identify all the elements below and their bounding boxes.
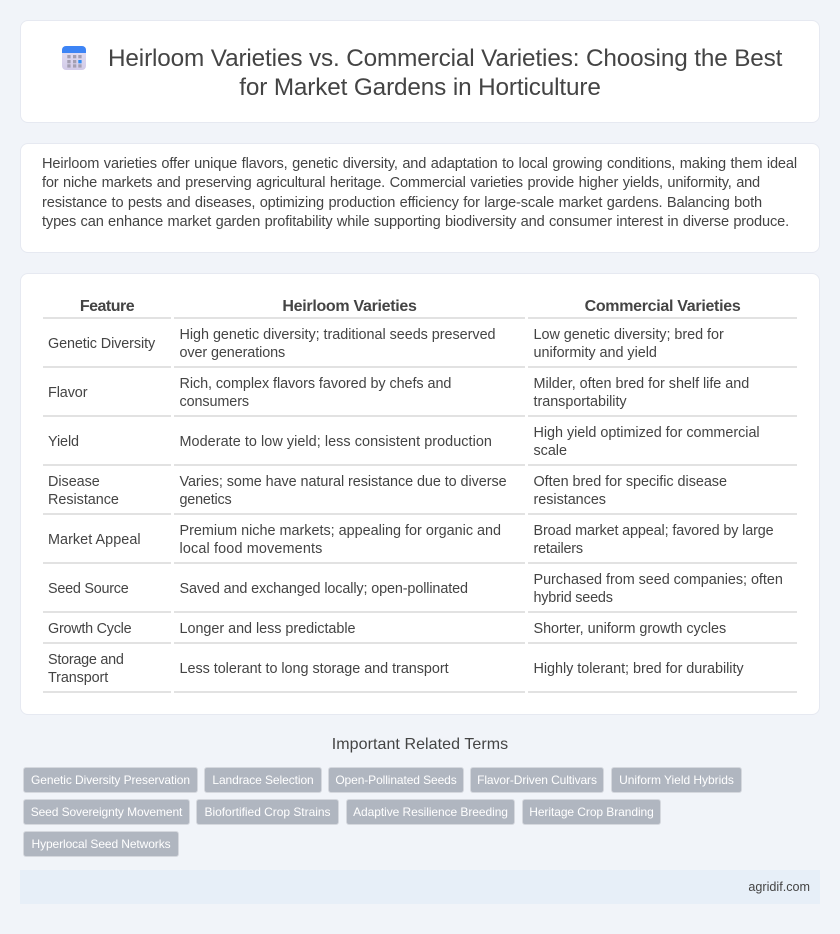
row: disease resistance: Resistance bbox=[48, 492, 119, 508]
tag: Biofortified Crop Strains bbox=[204, 805, 330, 819]
row: disease resistance: Often bred for specific disease bbox=[534, 474, 727, 490]
header panel bbox=[20, 20, 820, 123]
tag bbox=[23, 799, 190, 825]
tag bbox=[23, 831, 179, 857]
row: storage and transport: Transport bbox=[48, 670, 108, 686]
tag bbox=[23, 767, 198, 793]
row: seed source: hybrid seeds bbox=[534, 590, 613, 606]
row: market appeal: local food movements bbox=[180, 541, 322, 557]
tag bbox=[204, 767, 322, 793]
row: storage and transport bbox=[48, 652, 744, 686]
row: genetic diversity: High genetic diversity; traditional seeds preserved bbox=[180, 327, 496, 343]
tag bbox=[470, 767, 604, 793]
row: yield bbox=[48, 425, 760, 459]
row: disease resistance: Disease bbox=[48, 474, 100, 490]
row: storage and transport: Storage and bbox=[48, 652, 124, 668]
row: disease resistance: genetics bbox=[180, 492, 232, 508]
intro text: for niche markets and preserving agricultural heritage. Commercial varieties provide higher yields, uniformity, and bbox=[42, 175, 760, 191]
row: flavor bbox=[48, 376, 749, 410]
tag bbox=[196, 799, 339, 825]
row: growth cycle: Shorter, uniform growth cycles bbox=[534, 621, 726, 637]
table header: Feature bbox=[80, 298, 134, 315]
row: flavor: Rich, complex flavors favored by chefs and bbox=[180, 376, 451, 392]
row: seed source: Purchased from seed companies; often bbox=[534, 572, 783, 588]
row: disease resistance bbox=[48, 474, 727, 508]
related terms tags bbox=[23, 767, 742, 857]
row: flavor: consumers bbox=[180, 394, 249, 410]
row: seed source: Seed Source bbox=[48, 581, 128, 597]
row: genetic diversity bbox=[48, 327, 724, 361]
tag bbox=[522, 799, 661, 825]
row: market appeal: Market Appeal bbox=[48, 532, 141, 548]
related terms heading: Important Related Terms bbox=[332, 736, 508, 753]
row: genetic diversity: Genetic Diversity bbox=[48, 336, 155, 352]
row: growth cycle bbox=[48, 621, 726, 637]
tag: Flavor-Driven Cultivars bbox=[477, 773, 597, 787]
tag: Heritage Crop Branding bbox=[529, 805, 654, 819]
row: flavor: Milder, often bred for shelf life and bbox=[534, 376, 749, 392]
tag: Open-Pollinated Seeds bbox=[335, 773, 457, 787]
row: yield: Moderate to low yield; less consistent production bbox=[180, 434, 492, 450]
tag: Genetic Diversity Preservation bbox=[31, 773, 190, 787]
tag bbox=[328, 767, 464, 793]
row: genetic diversity: Low genetic diversity; bred for bbox=[534, 327, 724, 343]
footer source: agridif.com bbox=[748, 880, 810, 894]
tag: Landrace Selection bbox=[212, 773, 314, 787]
intro text bbox=[42, 156, 797, 230]
row: seed source: Saved and exchanged locally; open-pollinated bbox=[180, 581, 468, 597]
row: market appeal bbox=[48, 523, 773, 557]
row: flavor: Flavor bbox=[48, 385, 87, 401]
tag bbox=[611, 767, 742, 793]
row: storage and transport: Less tolerant to long storage and transport bbox=[180, 661, 449, 677]
tag: Uniform Yield Hybrids bbox=[619, 773, 734, 787]
row: yield: scale bbox=[534, 443, 567, 459]
row: growth cycle: Growth Cycle bbox=[48, 621, 131, 637]
row: storage and transport: Highly tolerant; bred for durability bbox=[534, 661, 744, 677]
tag bbox=[346, 799, 515, 825]
row: yield: Yield bbox=[48, 434, 79, 450]
tag: Hyperlocal Seed Networks bbox=[32, 837, 170, 851]
row: disease resistance: Varies; some have natural resistance due to diverse bbox=[180, 474, 507, 490]
title: for Market Gardens in Horticulture bbox=[239, 74, 601, 101]
row: genetic diversity: over generations bbox=[180, 345, 285, 361]
row: growth cycle: Longer and less predictable bbox=[180, 621, 356, 637]
footer bar bbox=[20, 870, 820, 904]
table header bbox=[80, 298, 740, 315]
tag: Adaptive Resilience Breeding bbox=[353, 805, 508, 819]
row: flavor: transportability bbox=[534, 394, 627, 410]
intro text: Heirloom varieties offer unique flavors, genetic diversity, and adaptation to local growing conditions, making them ideal bbox=[42, 156, 797, 172]
row: disease resistance: resistances bbox=[534, 492, 606, 508]
row: seed source bbox=[48, 572, 783, 606]
intro text: resistance to pests and diseases, optimizing production efficiency for large-scale market gardens. Balancing both bbox=[42, 195, 762, 211]
title: Heirloom Varieties vs. Commercial Varieties: Choosing the Best bbox=[108, 45, 782, 72]
row: genetic diversity: uniformity and yield bbox=[534, 345, 657, 361]
icon: calendar bbox=[62, 46, 86, 70]
row: market appeal: Premium niche markets; appealing for organic and bbox=[180, 523, 501, 539]
row: market appeal: retailers bbox=[534, 541, 583, 557]
row: yield: High yield optimized for commercial bbox=[534, 425, 760, 441]
comparison table panel bbox=[20, 273, 820, 715]
title bbox=[108, 45, 782, 101]
tag: Seed Sovereignty Movement bbox=[31, 805, 182, 819]
intro text: types can enhance market garden profitability while supporting biodiversity and consumer interest in diverse produce. bbox=[42, 214, 789, 230]
row: market appeal: Broad market appeal; favored by large bbox=[534, 523, 773, 539]
table header: Commercial Varieties bbox=[585, 298, 740, 315]
intro panel bbox=[20, 143, 820, 253]
table header: Heirloom Varieties bbox=[282, 298, 417, 315]
